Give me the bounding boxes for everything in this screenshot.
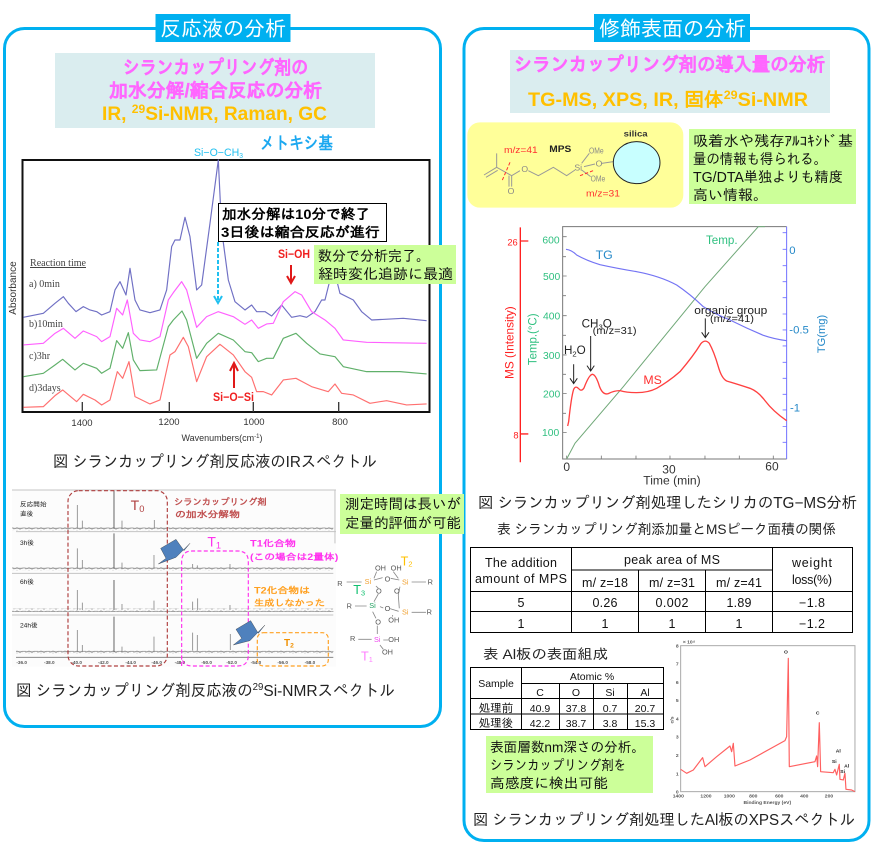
table: surface composition: Sample (478, 678, 514, 690)
peak annotations: 3 (598, 323, 603, 332)
structural formula: Si (365, 577, 372, 586)
fragment labels: m/z=41 (504, 145, 538, 155)
curve labels: MS (643, 373, 662, 387)
peak annotations: 2 (572, 349, 577, 358)
note: adsorbed water information (689, 129, 856, 204)
peak annotations: organic group (694, 305, 767, 317)
table: surface composition: C (536, 687, 544, 699)
curve a: 0min (23, 160, 427, 321)
XPS peak labels: Si (840, 769, 846, 775)
curve b: 10min (23, 282, 427, 345)
MPS molecule panel (467, 122, 683, 208)
time axis: 60 (765, 460, 779, 474)
time axis: 0 (563, 460, 570, 474)
row labels and axis: -46.0 (151, 660, 162, 665)
XPS axis labels: 200 (825, 793, 833, 799)
callout: hydrolysis finished (218, 204, 386, 242)
series labels: Reaction time (30, 258, 87, 269)
header box: hydrolysis analysis: 29 (132, 102, 146, 116)
header box: hydrolysis analysis: IR, (102, 104, 126, 125)
XPS axis labels: 5 (676, 698, 679, 704)
row labels and axis (16, 501, 316, 665)
temperature axis: 500 (543, 272, 561, 283)
XPS axis labels: 4 (676, 716, 679, 722)
peak annotations: H (564, 344, 572, 357)
peak annotations: (m/z=31) (593, 326, 637, 337)
callout: hydrolysis finished: 3日後は縮合反応が進行 (221, 224, 380, 240)
structural formula: R (428, 577, 433, 586)
x axis tick labels: 1000 (243, 417, 265, 428)
note: long measurement time: 定量的評価が可能 (345, 515, 462, 532)
XPS axis labels: Binding Energy (eV) (743, 800, 791, 806)
label and arrow: Si-O-Si (213, 363, 254, 404)
row labels and axis: -56.0 (277, 660, 288, 665)
label and arrow: Si-OH: Si−OH (278, 247, 310, 261)
fragment labels (502, 145, 620, 198)
curve d: 3days (23, 337, 427, 407)
structural formula: T (353, 583, 361, 597)
table: surface composition: 42.2 (530, 718, 550, 730)
table: peak area of MS: m/ z=18 (582, 576, 628, 590)
XPS peak labels: C (816, 711, 820, 717)
temperature axis: 300 (543, 351, 561, 362)
table: peak area of MS: 1 (669, 617, 676, 631)
TG axis: TG(mg) (816, 315, 828, 353)
structural formula: O (385, 604, 391, 613)
region T0: の加水分解物 (175, 510, 240, 520)
region T2: 2 (290, 643, 294, 650)
row labels and axis: 直後 (20, 510, 34, 518)
MS axis: 8 (513, 431, 519, 441)
table: surface composition: 処理後 (479, 717, 513, 730)
curve c: 3hr (23, 311, 427, 377)
header box: hydrolysis analysis (55, 53, 375, 128)
MS axis: 26 (507, 237, 518, 247)
peak annotations: O (603, 317, 612, 330)
XPS peak labels: Si (832, 759, 837, 765)
table: surface composition: Al (640, 687, 650, 699)
XPS axis labels: 1 (676, 771, 679, 777)
x axis tick labels: 1200 (158, 417, 180, 428)
note: quick analysis: 経時変化追跡に最適 (318, 267, 453, 283)
XPS axis labels: × 10⁴ (683, 639, 696, 645)
note: quick analysis (314, 245, 456, 284)
note: adsorbed water information: 量の情報も得られる。 (693, 152, 827, 168)
XPS axis labels: 600 (775, 793, 784, 799)
pointer icons (158, 539, 265, 645)
panel: reaction liquid analysis (4, 14, 440, 726)
header box: coupling agent amount (510, 50, 830, 113)
row labels and axis: -36.0 (16, 660, 27, 665)
table: surface composition: 3.8 (603, 718, 617, 730)
table: peak area of MS: 5 (518, 596, 525, 610)
region T0 (68, 491, 267, 666)
curve labels: Temp. (706, 233, 738, 247)
table title: peak area: 表 シランカップリング剤添加量とMSピーク面積の関係 (497, 521, 836, 537)
region T2 (254, 585, 328, 666)
region T1 (182, 534, 338, 666)
XPS axis labels: 6 (676, 680, 679, 686)
table: peak area of MS: 1.89 (726, 596, 752, 610)
table: surface composition: Si (605, 687, 615, 699)
note: surface depth: シランカップリング剤を (490, 757, 626, 773)
callout: hydrolysis finished: 加水分解は10分で終了 (222, 206, 370, 222)
region T2: T (284, 638, 290, 649)
table: surface composition: Atomic % (570, 671, 614, 683)
structural formula: Si (369, 601, 376, 610)
label: Si-O-CH3: Si−O−CH (194, 147, 241, 159)
header box: hydrolysis analysis: シランカップリング剤の (123, 57, 308, 79)
structural formula: T (401, 554, 408, 568)
heading: reaction liquid analysis: 反応液の分析 (160, 18, 286, 41)
structural formula: OH (388, 635, 399, 644)
row labels and axis: -42.0 (98, 660, 109, 665)
TG-MS chart (503, 227, 828, 487)
structural formula: OH (391, 564, 402, 573)
series labels: d)3days (29, 383, 61, 394)
curve labels: TG (596, 248, 613, 262)
table: surface composition: 38.7 (566, 718, 586, 730)
structural formula: R (350, 634, 355, 643)
XPS axis labels: c/s (669, 716, 675, 723)
x axis tick labels: 1400 (71, 418, 93, 429)
note: surface depth: 表面層数nm深さの分析。 (490, 739, 645, 755)
row labels and axis: -54.0 (251, 660, 262, 665)
peak annotations: O (577, 344, 586, 357)
temperature axis: 100 (542, 428, 560, 439)
NMR spectrum chart (12, 490, 338, 667)
TG axis: -1 (790, 403, 800, 415)
table: peak area of MS: 0.002 (656, 596, 689, 610)
XPS axis labels: 8 (676, 643, 679, 649)
caption: NMR spectrum: 29 (253, 682, 264, 693)
MPS molecule panel: OMe (591, 174, 605, 184)
arrow: methoxy dashed (214, 242, 222, 303)
temperature axis: Temp.(°C) (526, 313, 540, 365)
TG axis: -0.5 (789, 324, 809, 336)
axis label: absorbance: Absorbance (8, 261, 19, 315)
MS axis: MS (Intensity) (503, 306, 516, 379)
header box: hydrolysis analysis: Si-NMR, Raman, GC (145, 104, 327, 125)
XPS axis labels: 2 (676, 753, 679, 759)
note: surface depth (486, 736, 653, 793)
note: long measurement time (340, 494, 464, 534)
table: peak area of MS: peak area of MS (624, 553, 720, 567)
XPS axis labels: 800 (749, 793, 758, 799)
structural formula: R (427, 607, 432, 616)
time axis: Time (min) (643, 473, 701, 487)
x axis tick labels: -1 (254, 434, 260, 440)
row labels and axis: -38.0 (44, 660, 55, 665)
time axis (563, 460, 779, 487)
XPS axis labels (669, 639, 833, 806)
table: surface composition: 処理前 (479, 702, 513, 715)
table title: surface composition: 表 Al板の表面組成 (483, 646, 608, 662)
MPS molecule panel: OMe (589, 145, 604, 155)
label and arrow: Si-OH (278, 247, 310, 283)
x axis tick labels: ) (260, 433, 263, 443)
table: surface composition: 0.7 (603, 703, 617, 715)
table: peak area of MS (470, 548, 852, 632)
structural formula: Si (402, 578, 409, 587)
TG axis (789, 245, 828, 415)
curve labels (596, 233, 738, 387)
region T0: シランカップリング剤 (174, 497, 267, 507)
structural formula: 2 (408, 560, 412, 569)
row labels and axis: -48.0 (175, 660, 186, 665)
structural formula: OH (375, 564, 386, 573)
structural formula: R (347, 601, 352, 610)
silica particle (613, 142, 660, 184)
temperature axis: 400 (543, 311, 561, 322)
XPS spectrum chart (669, 639, 855, 806)
caption: NMR spectrum: 図 シランカップリング剤反応液の (16, 683, 260, 700)
heading: modified surface analysis: 修飾表面の分析 (599, 18, 746, 41)
XPS axis labels: 1000 (724, 793, 735, 799)
structural formula: O (385, 574, 391, 583)
peak regions and annotations (68, 491, 338, 666)
label: methoxy group: メトキシ基 (260, 134, 333, 153)
x axis tick labels: Wavenumbers(cm (181, 433, 254, 443)
header box: coupling agent amount: TG-MS, XPS, IR, 固体 (528, 90, 716, 111)
structural formula (337, 554, 433, 664)
note: surface depth: 高感度に検出可能 (490, 775, 608, 791)
region T1: (この場合は2量体) (250, 552, 338, 562)
XPS axis labels: 400 (800, 793, 809, 799)
XPS axis labels: 1400 (673, 793, 684, 799)
spectrum rows (16, 491, 333, 657)
XPS peak labels: Al (836, 749, 841, 755)
caption: NMR spectrum: Si-NMRスペクトル (263, 683, 395, 700)
series labels: b)10min (29, 319, 63, 330)
structural formula: O (394, 587, 400, 596)
series labels: c)3hr (29, 351, 51, 362)
structural formula: OH (382, 648, 393, 657)
table: surface composition: O (572, 687, 580, 699)
note: quick analysis: 数分で分析完了。 (318, 249, 430, 265)
XPS peak labels (784, 650, 850, 775)
structural formula: T (361, 650, 369, 664)
label and arrow: Si-O-Si: Si−O−Si (213, 390, 254, 404)
caption: TG-MS: 図 シランカップリング剤処理したシリカのTG−MS分析 (478, 494, 857, 512)
MPS molecule panel: silica (624, 129, 648, 139)
caption: IR spectrum: 図 シランカップリング剤反応液のIRスペクトル (53, 453, 377, 471)
row labels and axis: 6h後 (20, 578, 34, 586)
label: Si-O-CH3: 3 (239, 153, 243, 160)
row labels and axis: 反応開始 (20, 501, 47, 509)
table: surface composition: 40.9 (530, 703, 550, 715)
table: peak area of MS: loss(%) (792, 573, 832, 587)
row labels and axis: 3h後 (20, 539, 34, 547)
region T1: T (207, 534, 216, 550)
region T1: T1化合物 (250, 539, 296, 549)
series labels: a) 0min (29, 279, 60, 290)
table: peak area of MS: 1 (736, 617, 743, 631)
peak annotations: (m/z=41) (710, 314, 754, 325)
table: peak area of MS: weight (791, 556, 833, 570)
table: peak area of MS: −1.2 (799, 617, 825, 631)
note: adsorbed water information: 吸着水や残存ｱﾙｺｷｼﾄﾞ基 (693, 133, 853, 150)
note: long measurement time: 測定時間は長いが (345, 496, 462, 513)
table: peak area of MS: −1.8 (799, 596, 825, 610)
IR spectrum chart (8, 160, 430, 443)
MPS molecule panel: O (596, 159, 603, 169)
row labels and axis: 24h後 (20, 622, 38, 630)
region T0: 0 (139, 504, 144, 514)
structural formula: R (337, 579, 343, 588)
table: peak area of MS: 1 (602, 617, 609, 631)
structural formula: Si (374, 635, 381, 644)
MS curve (568, 341, 787, 426)
header box: coupling agent amount: Si-NMR (738, 90, 808, 111)
peak annotations: CH (582, 317, 598, 330)
XPS peak labels: Al (844, 764, 850, 770)
XPS axis labels: 0 (676, 789, 679, 795)
XPS axis labels: 3 (676, 735, 679, 741)
MPS molecule panel: Si (574, 163, 582, 173)
structural formula: 1 (369, 655, 373, 664)
region T1: 1 (216, 541, 221, 551)
peak annotations (564, 305, 767, 384)
MPS molecule panel: MPS (549, 144, 571, 154)
molecule structure (484, 153, 613, 187)
table: peak area of MS: m/ z=41 (716, 576, 762, 590)
header box: hydrolysis analysis: 加水分解/縮合反応の分析 (109, 80, 322, 102)
row labels and axis: -44.0 (125, 660, 136, 665)
structural formula: O (375, 617, 381, 626)
time axis: 30 (662, 462, 676, 476)
temperature axis: 600 (542, 235, 560, 246)
structural formula: O (376, 587, 382, 596)
temperature line (567, 227, 765, 459)
table: surface composition: 15.3 (635, 718, 655, 730)
row labels and axis: -58.0 (305, 660, 316, 665)
structural formula: Si (402, 608, 409, 617)
header box: coupling agent amount: シランカップリング剤の導入量の分析 (514, 54, 825, 76)
structural formula: 3 (361, 588, 365, 597)
note: adsorbed water information: TG/DTA単独よりも精度 (693, 170, 843, 186)
row labels and axis: -52.0 (226, 660, 237, 665)
table: peak area of MS: 0.26 (592, 596, 618, 610)
table: peak area of MS: The addition (485, 556, 557, 570)
MS axis (503, 227, 528, 462)
MPS molecule panel: O (508, 186, 515, 196)
temperature axis (526, 235, 561, 439)
table: peak area of MS: m/ z=31 (649, 576, 695, 590)
region T0: T (131, 497, 139, 513)
XPS axis labels: 1200 (700, 793, 712, 799)
XPS peak labels: O (784, 650, 788, 656)
table: peak area of MS: amount of MPS (475, 572, 567, 586)
table: peak area of MS: 1 (518, 617, 525, 631)
baseline noise (12, 527, 333, 531)
TG axis: 0 (789, 245, 796, 257)
panel: modified surface analysis (464, 14, 869, 840)
header box: coupling agent amount: 29 (724, 88, 738, 102)
table: surface composition (470, 668, 664, 730)
table: surface composition: 37.8 (566, 703, 586, 715)
note: adsorbed water information: 高い情報。 (693, 188, 768, 204)
structural formula: OH (388, 616, 399, 625)
fragment labels: m/z=31 (586, 188, 620, 198)
series labels (29, 258, 87, 394)
table: surface composition: 20.7 (635, 703, 655, 715)
caption: XPS spectrum: 図 シランカップリング剤処理したAl板のXPSスペクトル (473, 811, 855, 829)
row labels and axis: -40.0 (71, 660, 82, 665)
region T2: T2化合物は (254, 585, 310, 595)
TG curve (566, 249, 787, 341)
temperature axis: 200 (543, 389, 561, 400)
x axis tick labels: 800 (332, 417, 348, 428)
row labels and axis: -50.0 (201, 660, 212, 665)
XPS axis labels: 7 (676, 662, 679, 668)
region T2: 生成しなかった (254, 598, 325, 608)
MPS molecule panel: O (521, 164, 528, 174)
x axis tick labels (71, 417, 348, 443)
